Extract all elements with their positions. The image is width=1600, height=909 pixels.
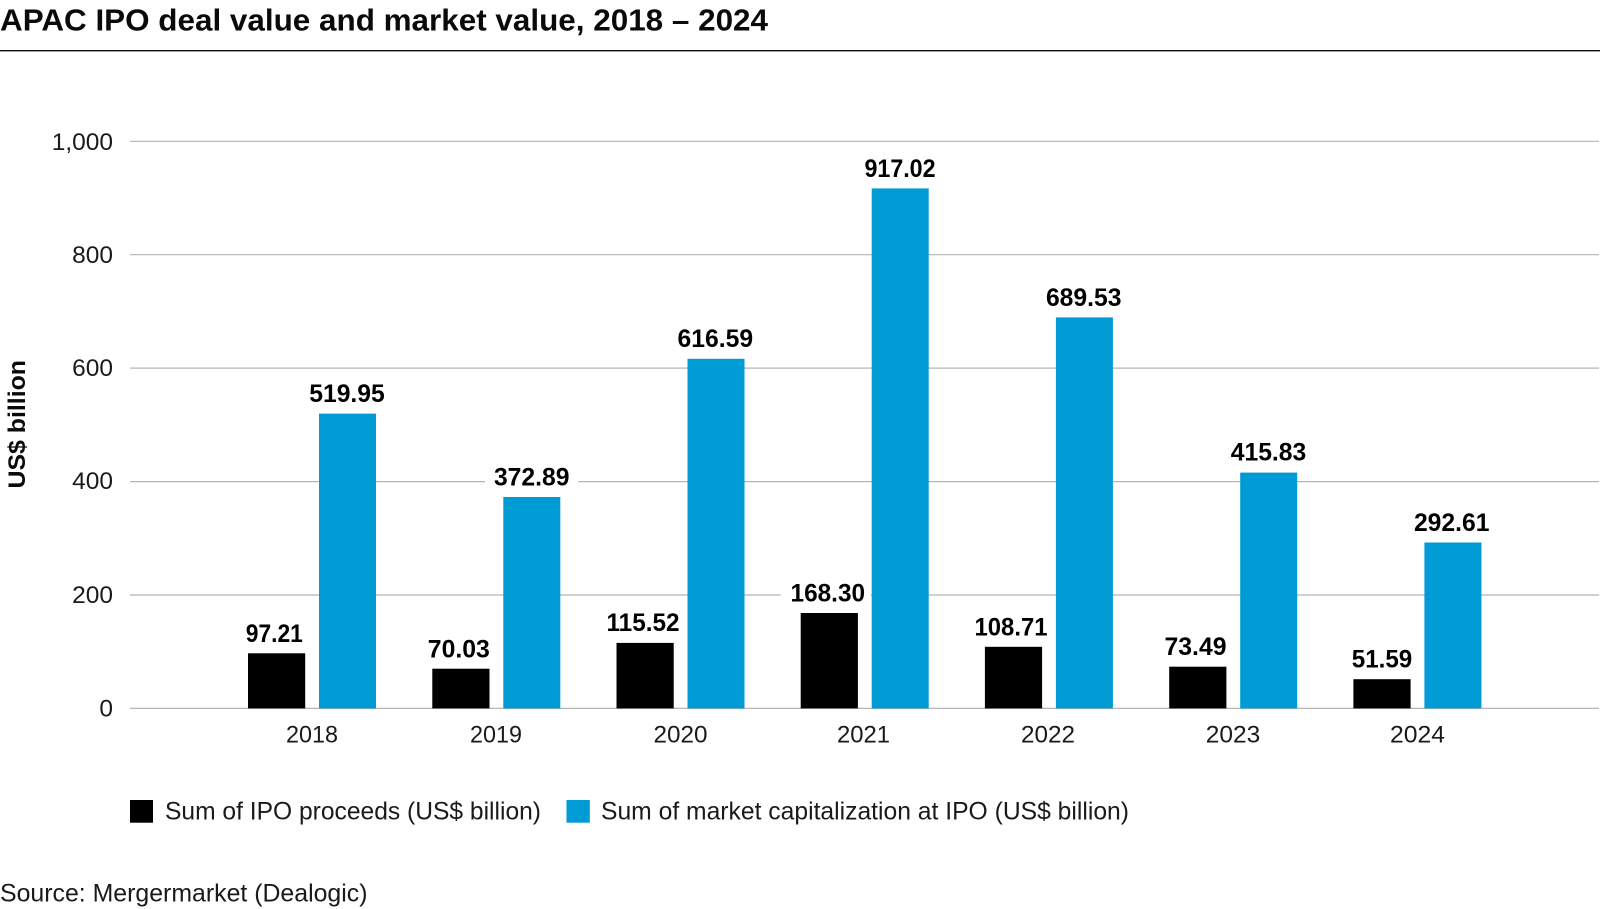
legend — [130, 797, 1129, 825]
legend: market capitalization: Sum of market capitalization at IPO (US$ billion) — [601, 797, 1129, 825]
market capitalization value labels: 519.95 — [309, 380, 385, 408]
proceeds value labels: 115.52 — [606, 609, 680, 637]
market capitalization value labels: 372.89 — [494, 464, 569, 492]
market capitalization value labels: 292.61 — [1414, 509, 1490, 537]
market capitalization value labels: 616.59 — [678, 325, 753, 353]
y-axis tick labels: 200 — [72, 582, 113, 609]
label backgrounds — [485, 474, 871, 602]
bars: 2022 — [985, 317, 1113, 708]
bars: 2020 — [616, 359, 744, 708]
x-axis year labels: 2018 — [286, 722, 338, 749]
market capitalization value labels: 689.53 — [1046, 284, 1121, 312]
bars: 2024 — [1353, 542, 1481, 708]
x-axis year labels — [286, 722, 1445, 749]
y-axis tick labels: 800 — [72, 242, 113, 269]
market capitalization value labels: 415.83 — [1231, 439, 1306, 467]
bars: 2021 — [801, 188, 929, 708]
bars: 2018 — [248, 414, 376, 708]
x-axis year labels: 2022 — [1021, 722, 1075, 749]
x-axis year labels: 2019 — [470, 722, 522, 749]
market capitalization value labels — [309, 155, 1490, 537]
bars: 2023 — [1169, 473, 1297, 708]
market capitalization value labels: 917.02 — [864, 155, 936, 183]
bars: 2019 — [432, 497, 560, 708]
y-axis tick labels — [52, 129, 113, 722]
bar chart — [248, 188, 1481, 708]
y-axis tick labels: 1,000 — [52, 129, 113, 156]
y-axis tick labels: 600 — [72, 355, 113, 382]
x-axis year labels: 2020 — [654, 722, 708, 749]
proceeds value labels: 73.49 — [1164, 633, 1226, 661]
x-axis year labels: 2023 — [1206, 722, 1260, 749]
x-axis year labels: 2024 — [1390, 722, 1445, 749]
y-axis tick labels: 0 — [99, 696, 113, 722]
x-axis year labels: 2021 — [837, 722, 890, 749]
proceeds value labels: 168.30 — [791, 580, 865, 608]
proceeds value labels: 51.59 — [1352, 646, 1412, 674]
proceeds value labels: 97.21 — [246, 620, 303, 648]
y-axis tick labels: 400 — [72, 468, 113, 495]
proceeds value labels — [246, 580, 1412, 674]
title: APAC IPO deal value and market value, 2018 – 2024 — [0, 2, 769, 38]
y-axis title: US$ billion — [4, 360, 31, 488]
source note: Source: Mergermarket (Dealogic) — [0, 880, 368, 908]
legend: IPO proceeds: Sum of IPO proceeds (US$ billion) — [165, 797, 541, 825]
proceeds value labels: 108.71 — [974, 614, 1048, 642]
proceeds value labels: 70.03 — [428, 636, 490, 664]
